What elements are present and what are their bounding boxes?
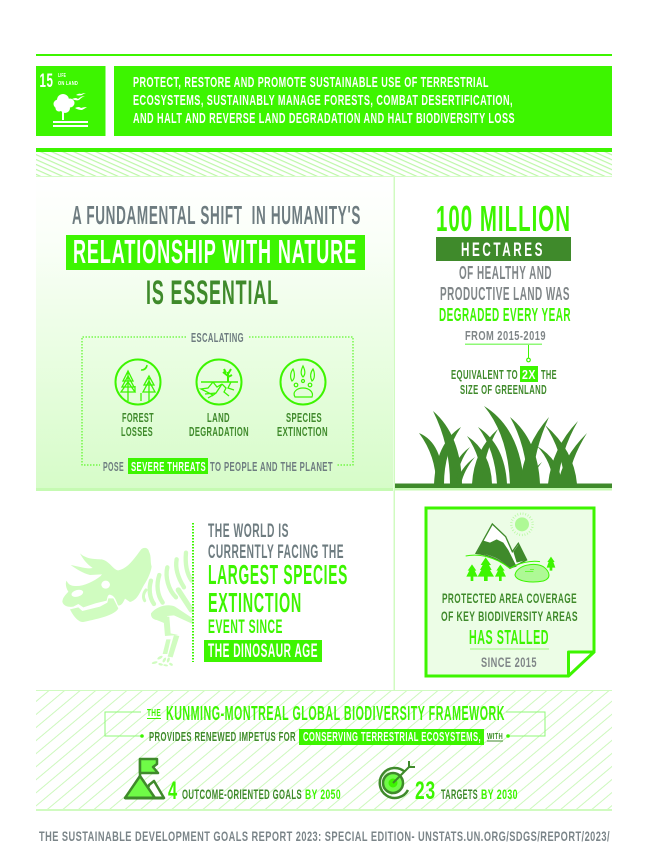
- panel: relationship with nature: [36, 177, 393, 491]
- text: pose severe threats: TO PEOPLE AND THE PLANET: [210, 459, 333, 474]
- targets text: BY 2030: [481, 786, 518, 802]
- text: species extinction statement: EXTINCTION: [208, 587, 302, 618]
- goals text: OUTCOME-ORIENTED GOALS: [182, 786, 302, 802]
- label: land degradation: DEGRADATION: [189, 424, 249, 439]
- targets text: TARGETS: [441, 786, 478, 802]
- label: forest losses: LOSSES: [121, 424, 153, 439]
- heading: relationship with nature: [66, 233, 365, 270]
- targets text: 23: [415, 777, 436, 805]
- panel: protected area note: HAS STALLED: [469, 627, 549, 649]
- panel: protected area note: [426, 508, 594, 676]
- text: species extinction statement: EVENT SINCE: [208, 617, 283, 638]
- text: equivalent: [451, 366, 557, 397]
- text: renewed impetus: PROVIDES RENEWED IMPETUS FOR: [149, 729, 296, 744]
- goals text: [168, 777, 341, 805]
- text: renewed impetus: CONSERVING TERRESTRIAL ECOSYSTEMS,: [303, 729, 481, 744]
- text: species extinction statement: THE WORLD IS: [208, 521, 289, 542]
- heading: relationship with nature: RELATIONSHIP WITH NATURE: [73, 233, 357, 270]
- panel: SDG 15 badge: [36, 66, 106, 136]
- text: pose severe threats: SEVERE THREATS: [131, 459, 206, 474]
- heading: framework: THE: [147, 708, 161, 719]
- targets text: [415, 777, 518, 805]
- text: equivalent: EQUIVALENT TO: [451, 367, 518, 382]
- panel: goal statement banner: [114, 66, 612, 136]
- heading: is essential: IS ESSENTIAL: [146, 274, 279, 312]
- text: pose severe threats: [103, 458, 333, 474]
- text: species extinction statement: THE DINOSAUR AGE: [208, 641, 318, 662]
- goals text: BY 2050: [305, 786, 341, 802]
- icon: target: [380, 761, 415, 798]
- label: species extinction: SPECIES: [286, 410, 322, 425]
- text: renewed impetus: WITH: [487, 732, 503, 741]
- text: equivalent: 2X: [522, 367, 536, 382]
- hectares bar: [436, 237, 571, 261]
- icon: tree and birds: [53, 93, 88, 127]
- text: species extinction statement: CURRENTLY FACING THE: [208, 542, 344, 563]
- label: land degradation: LAND: [207, 410, 230, 425]
- label: species extinction: EXTINCTION: [277, 424, 328, 439]
- panel: SDG 15 badge: 15: [40, 71, 54, 92]
- text: equivalent: THE: [541, 367, 557, 382]
- heading: fundamental shift: A FUNDAMENTAL SHIFT IN HUMANITY'S: [72, 200, 361, 230]
- text: renewed impetus: [149, 729, 503, 745]
- label: land degradation: [189, 410, 249, 439]
- icon: land degradation: [196, 360, 242, 404]
- illustration: triceratops skeleton: [62, 548, 193, 667]
- text: equivalent: SIZE OF GREENLAND: [460, 382, 547, 397]
- text: pose severe threats: POSE: [103, 459, 124, 474]
- panel: SDG 15 badge: ON LAND: [58, 81, 78, 87]
- icon: forest losses: [116, 360, 160, 404]
- panel: 100 million hectares: OF HEALTHY AND: [459, 263, 552, 283]
- bracket: [105, 712, 545, 736]
- icon: species extinction paw: [280, 360, 326, 404]
- panel: 100 million hectares: [395, 198, 612, 490]
- connector: [465, 344, 542, 362]
- goals text: 4: [168, 777, 178, 805]
- panel: protected area note: SINCE 2015: [481, 654, 537, 670]
- label: escalating: ESCALATING: [191, 330, 244, 345]
- top rule: [36, 54, 612, 56]
- panel: 100 million hectares: FROM 2015-2019: [465, 328, 546, 343]
- illustration: grass: [395, 406, 612, 490]
- label: species extinction: [277, 410, 328, 439]
- hectares bar: HECTARES: [461, 240, 545, 261]
- text: LARGEST SPECIES: [208, 559, 348, 590]
- icon: mountain flag: [125, 759, 164, 798]
- heading: framework: [147, 703, 505, 725]
- icon: mountains and trees: [466, 514, 555, 582]
- panel: Kunming-Montreal framework: [36, 690, 612, 811]
- label: forest losses: FOREST: [122, 410, 154, 425]
- label: forest losses: [121, 410, 154, 439]
- text: species extinction statement: [204, 521, 348, 662]
- panel: SDG 15 badge: LIFE: [58, 73, 66, 79]
